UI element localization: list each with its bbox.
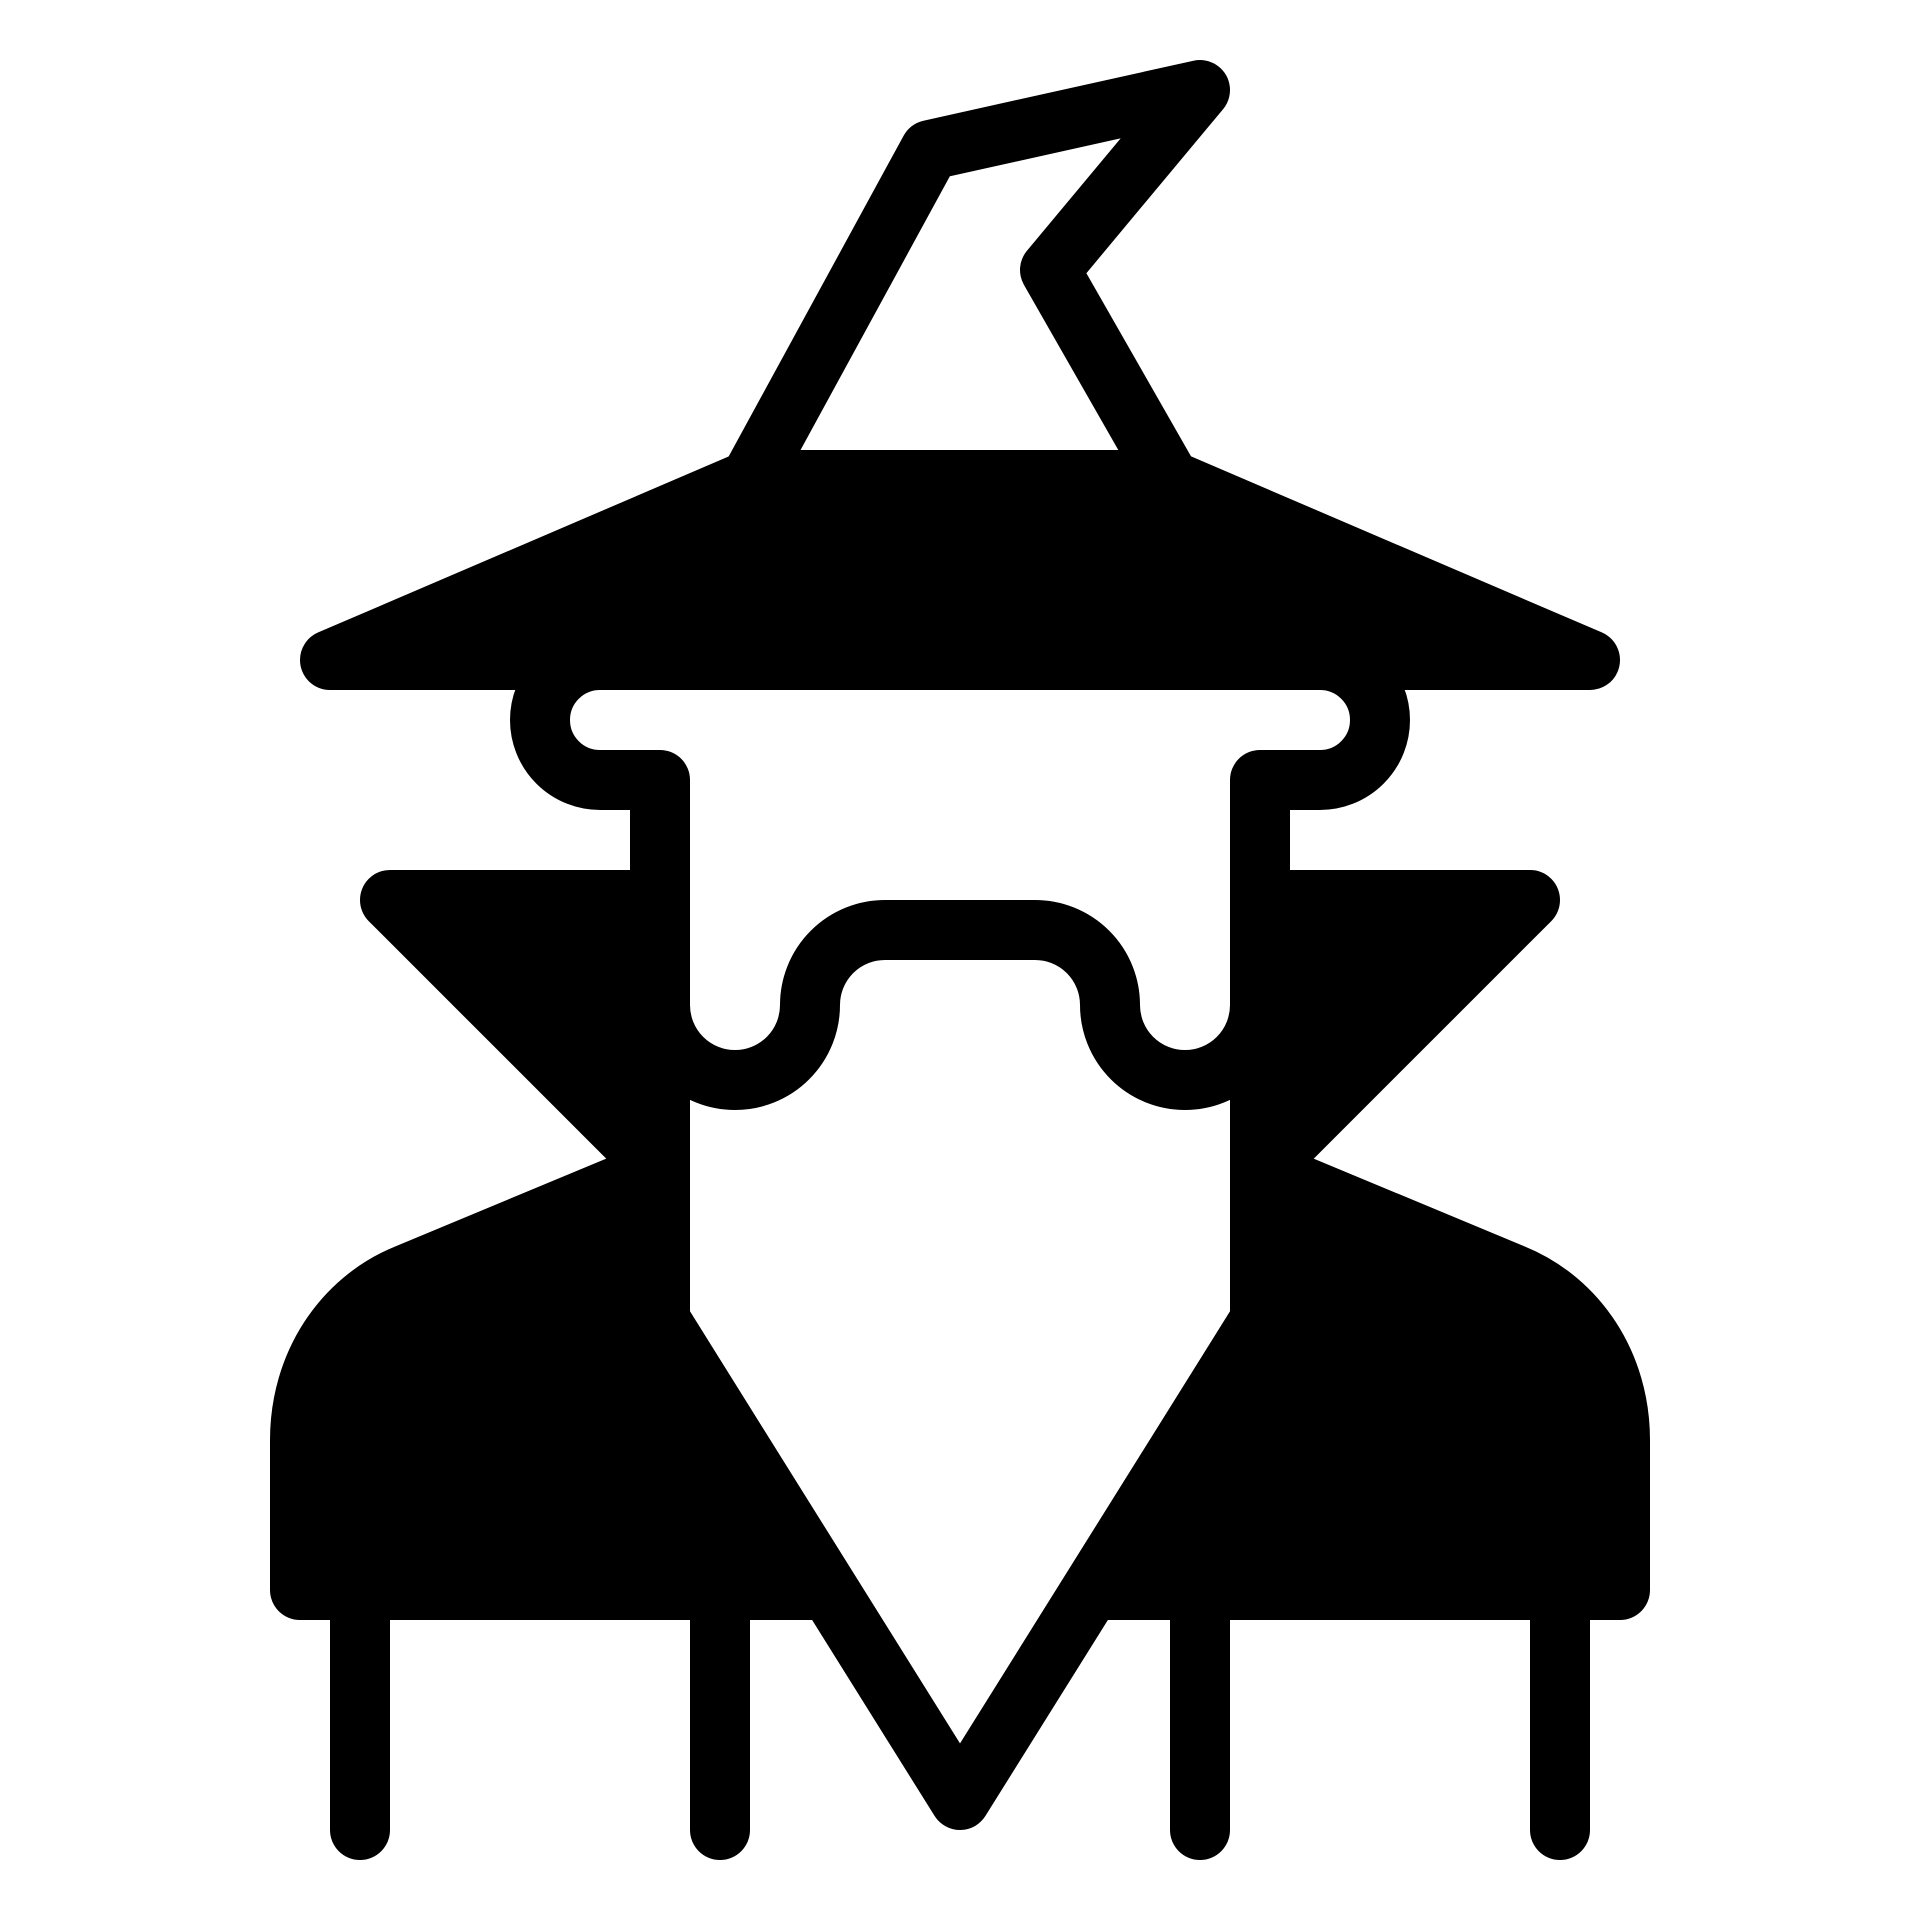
right cape shoulder xyxy=(1092,1169,1620,1590)
hair band, face and moustache outline xyxy=(540,660,1380,1080)
left cape shoulder xyxy=(300,1169,828,1590)
left collar xyxy=(390,900,660,1170)
right collar xyxy=(1260,900,1530,1170)
left fringe strand xyxy=(360,1590,720,1830)
hat brim xyxy=(330,480,1590,660)
hat crown xyxy=(750,90,1200,480)
beard outline xyxy=(660,1005,1260,1800)
right fringe strand xyxy=(1200,1590,1560,1830)
